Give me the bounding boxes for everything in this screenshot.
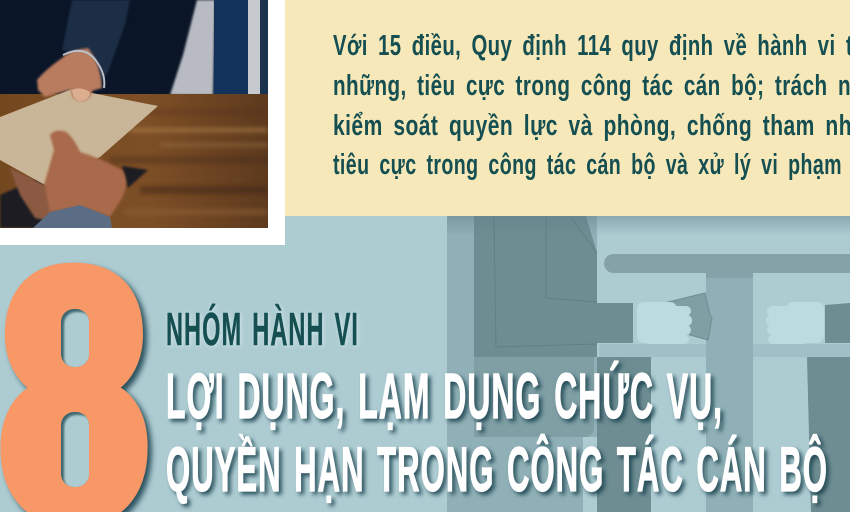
bottom hand <box>44 131 126 217</box>
left shelf <box>599 344 706 357</box>
shirt <box>170 0 215 95</box>
lower fingers <box>10 168 52 220</box>
jacket lines <box>494 216 597 347</box>
right shelf <box>753 344 850 357</box>
wood grain <box>110 112 268 212</box>
jacket <box>474 216 633 357</box>
right hand <box>766 302 824 344</box>
tie <box>214 0 248 95</box>
thumb nail <box>72 88 90 101</box>
jacket right <box>260 0 268 95</box>
left hand <box>637 302 692 344</box>
white photo frame <box>0 0 285 245</box>
lower coat <box>474 357 594 437</box>
wooden table <box>0 94 268 228</box>
envelope <box>0 89 158 185</box>
top hand <box>37 48 102 97</box>
table leg <box>706 273 753 512</box>
dark background <box>0 0 214 94</box>
left lower panel <box>597 357 651 512</box>
top finger <box>71 63 97 101</box>
upper counter <box>61 309 89 367</box>
background panel <box>0 216 850 512</box>
yellow panel <box>285 0 850 216</box>
jacket sleeve <box>62 0 130 85</box>
left arm <box>597 303 633 343</box>
counter fill <box>48 290 102 500</box>
shirt cuff <box>63 51 104 88</box>
table top <box>604 254 850 273</box>
money <box>664 293 712 340</box>
heading small: NHÓM HÀNH VI <box>166 303 359 355</box>
top shade <box>447 216 850 236</box>
table shadow <box>0 166 148 228</box>
illustration: bribe handover <box>447 216 850 512</box>
sleeve <box>33 205 112 228</box>
figure left legs <box>447 216 597 512</box>
shirt right <box>248 0 260 95</box>
right arm <box>825 303 850 343</box>
right lower panel <box>807 357 850 512</box>
photo: envelope handover <box>0 0 268 228</box>
intro text <box>333 30 850 181</box>
lower counter <box>61 412 89 487</box>
